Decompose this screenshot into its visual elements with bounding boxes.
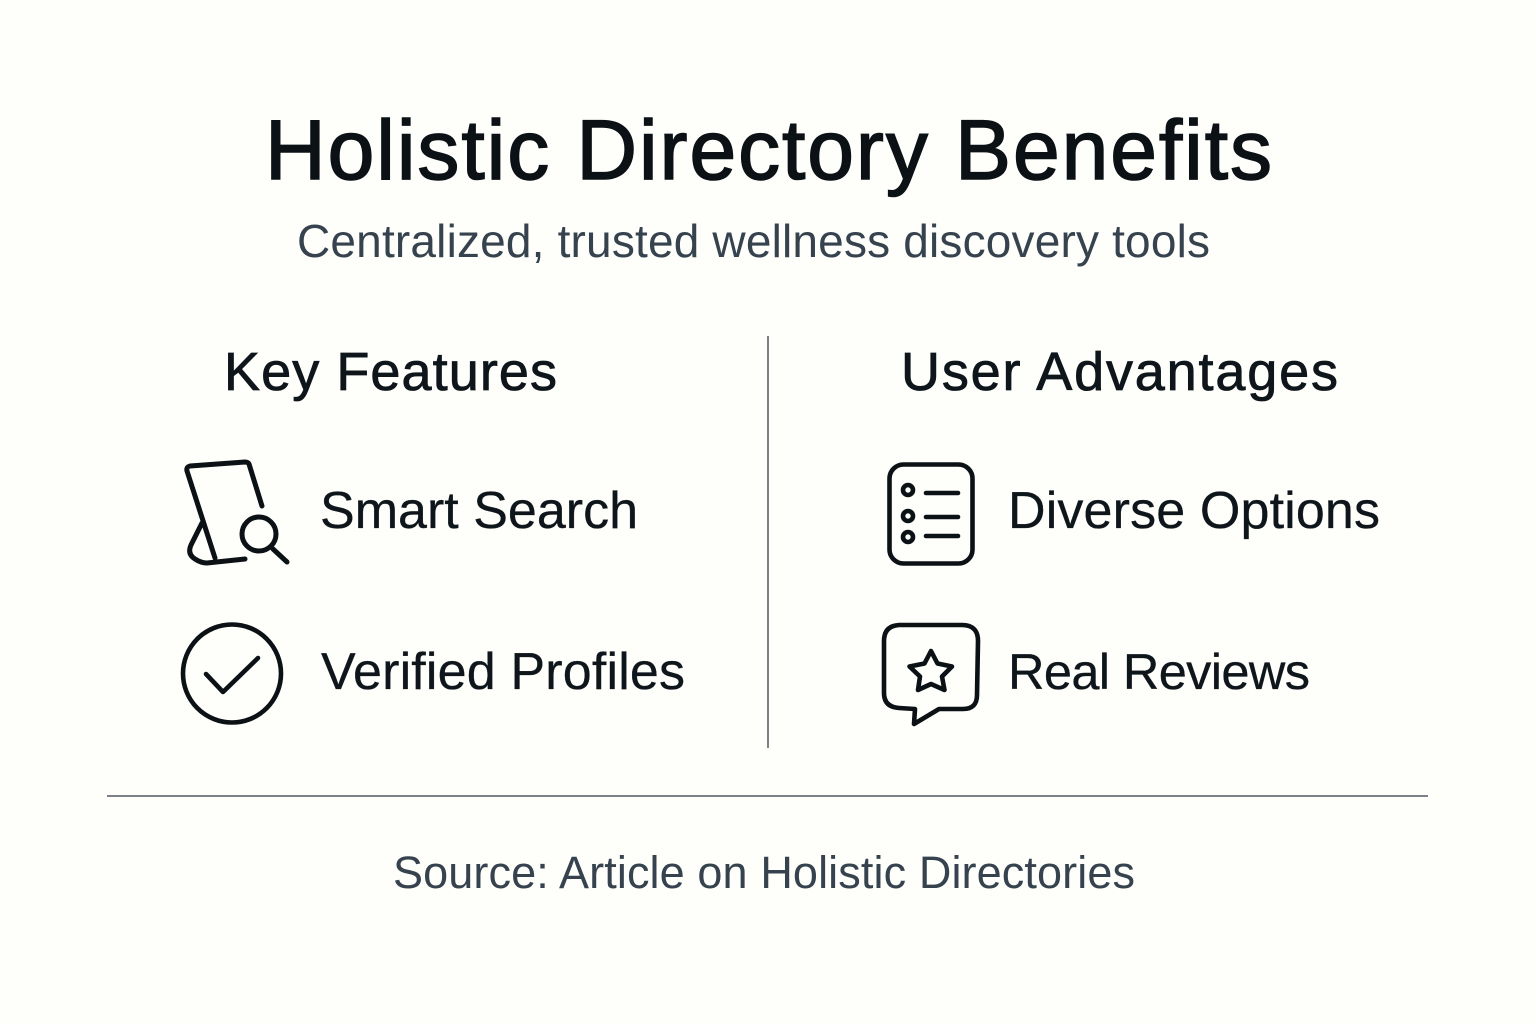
panel: key features [183, 342, 685, 722]
label: diverse options: Diverse Options [1008, 482, 1380, 540]
icon: list [890, 464, 972, 564]
subtitle: Centralized, trusted wellness discovery tools [297, 215, 1210, 267]
panel: user advantages [884, 342, 1380, 724]
label: smart search: Smart Search [320, 482, 638, 540]
title: Holistic Directory Benefits [265, 103, 1272, 197]
vertical divider [767, 336, 769, 748]
source note: Source: Article on Holistic Directories [393, 847, 1135, 898]
label: verified profiles: Verified Profiles [321, 643, 685, 701]
horizontal divider [107, 795, 1428, 797]
advantage: real reviews [884, 625, 1310, 724]
label: real reviews: Real Reviews [1008, 643, 1310, 700]
heading: key features: Key Features [224, 342, 557, 402]
feature: smart search [187, 462, 638, 563]
icon: speech bubble with star [884, 625, 978, 724]
feature: verified profiles [183, 624, 685, 722]
advantage: diverse options [890, 464, 1380, 564]
icon: check circle [183, 624, 281, 722]
icon: document with magnifier [187, 462, 287, 563]
heading: user advantages: User Advantages [901, 342, 1338, 402]
